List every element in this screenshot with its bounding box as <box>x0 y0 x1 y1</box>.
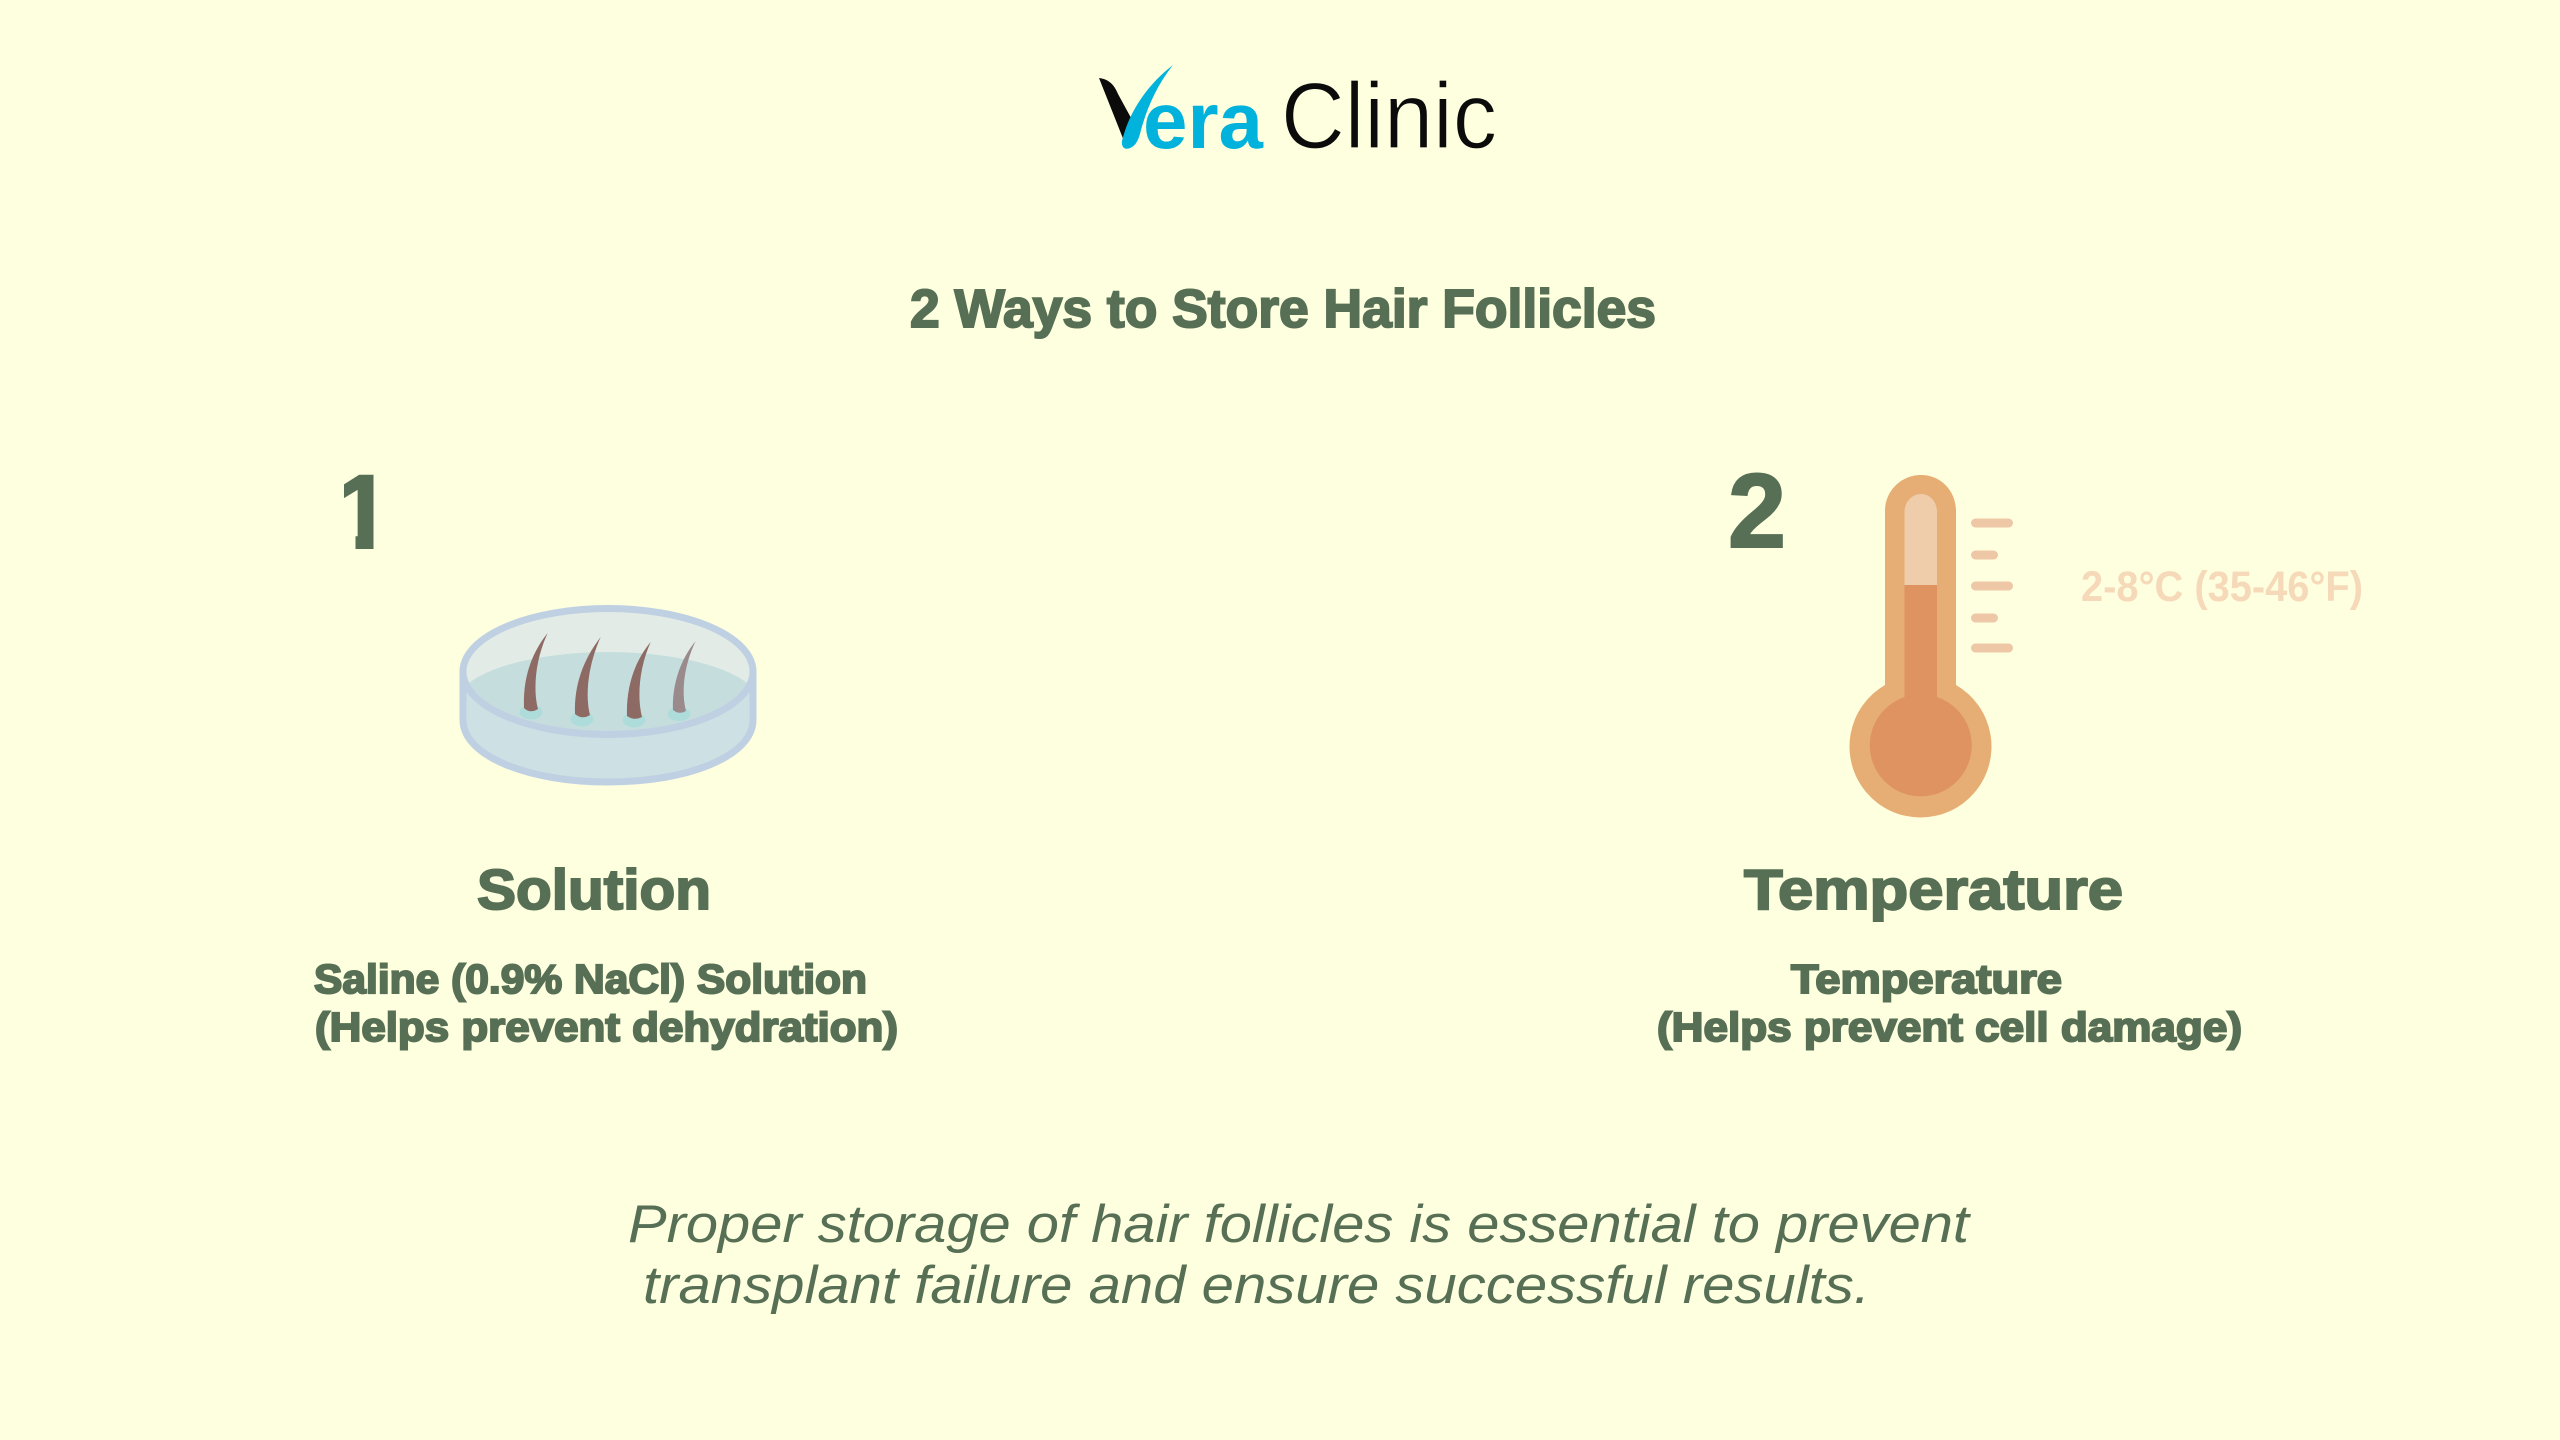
thermometer ticks <box>1971 518 2013 652</box>
footer statement: transplant failure and ensure successful results. <box>643 1256 1870 1315</box>
icon: thermometer <box>1849 475 2013 817</box>
description: temperature: (Helps prevent cell damage) <box>1657 1004 2242 1050</box>
follicle 1 <box>520 633 548 720</box>
panel: temperature <box>1657 453 2363 1050</box>
description: solution <box>314 956 898 1050</box>
number 2: 2 <box>1728 453 1786 570</box>
footer statement <box>628 1195 1971 1315</box>
description: temperature <box>1657 956 2242 1050</box>
logo text: era: era <box>1143 76 1263 165</box>
heading: Solution: Solution <box>477 858 711 922</box>
logo mark: V check <box>1099 65 1173 149</box>
description: temperature: Temperature <box>1791 956 2062 1002</box>
description: solution: Saline (0.9% NaCl) Solution <box>314 956 867 1002</box>
footer statement: Proper storage of hair follicles is essential to prevent <box>628 1195 1971 1254</box>
follicle 2 <box>570 637 601 726</box>
follicle 3 <box>622 642 651 728</box>
temperature range label: 2-8°C (35-46°F) <box>2081 563 2363 611</box>
logo: Vera Clinic <box>1099 63 1497 168</box>
logo text: Clinic: Clinic <box>1281 63 1497 168</box>
infographic canvas <box>314 65 2361 1314</box>
icon: petri dish with hair follicles <box>456 608 760 782</box>
description: solution: (Helps prevent dehydration) <box>315 1004 898 1050</box>
title: 2 Ways to Store Hair Follicles <box>910 279 1656 339</box>
follicle 4 <box>668 641 696 721</box>
heading: Temperature: Temperature <box>1744 858 2123 922</box>
panel: solution <box>314 454 898 1050</box>
number 1: 1 <box>334 454 394 571</box>
